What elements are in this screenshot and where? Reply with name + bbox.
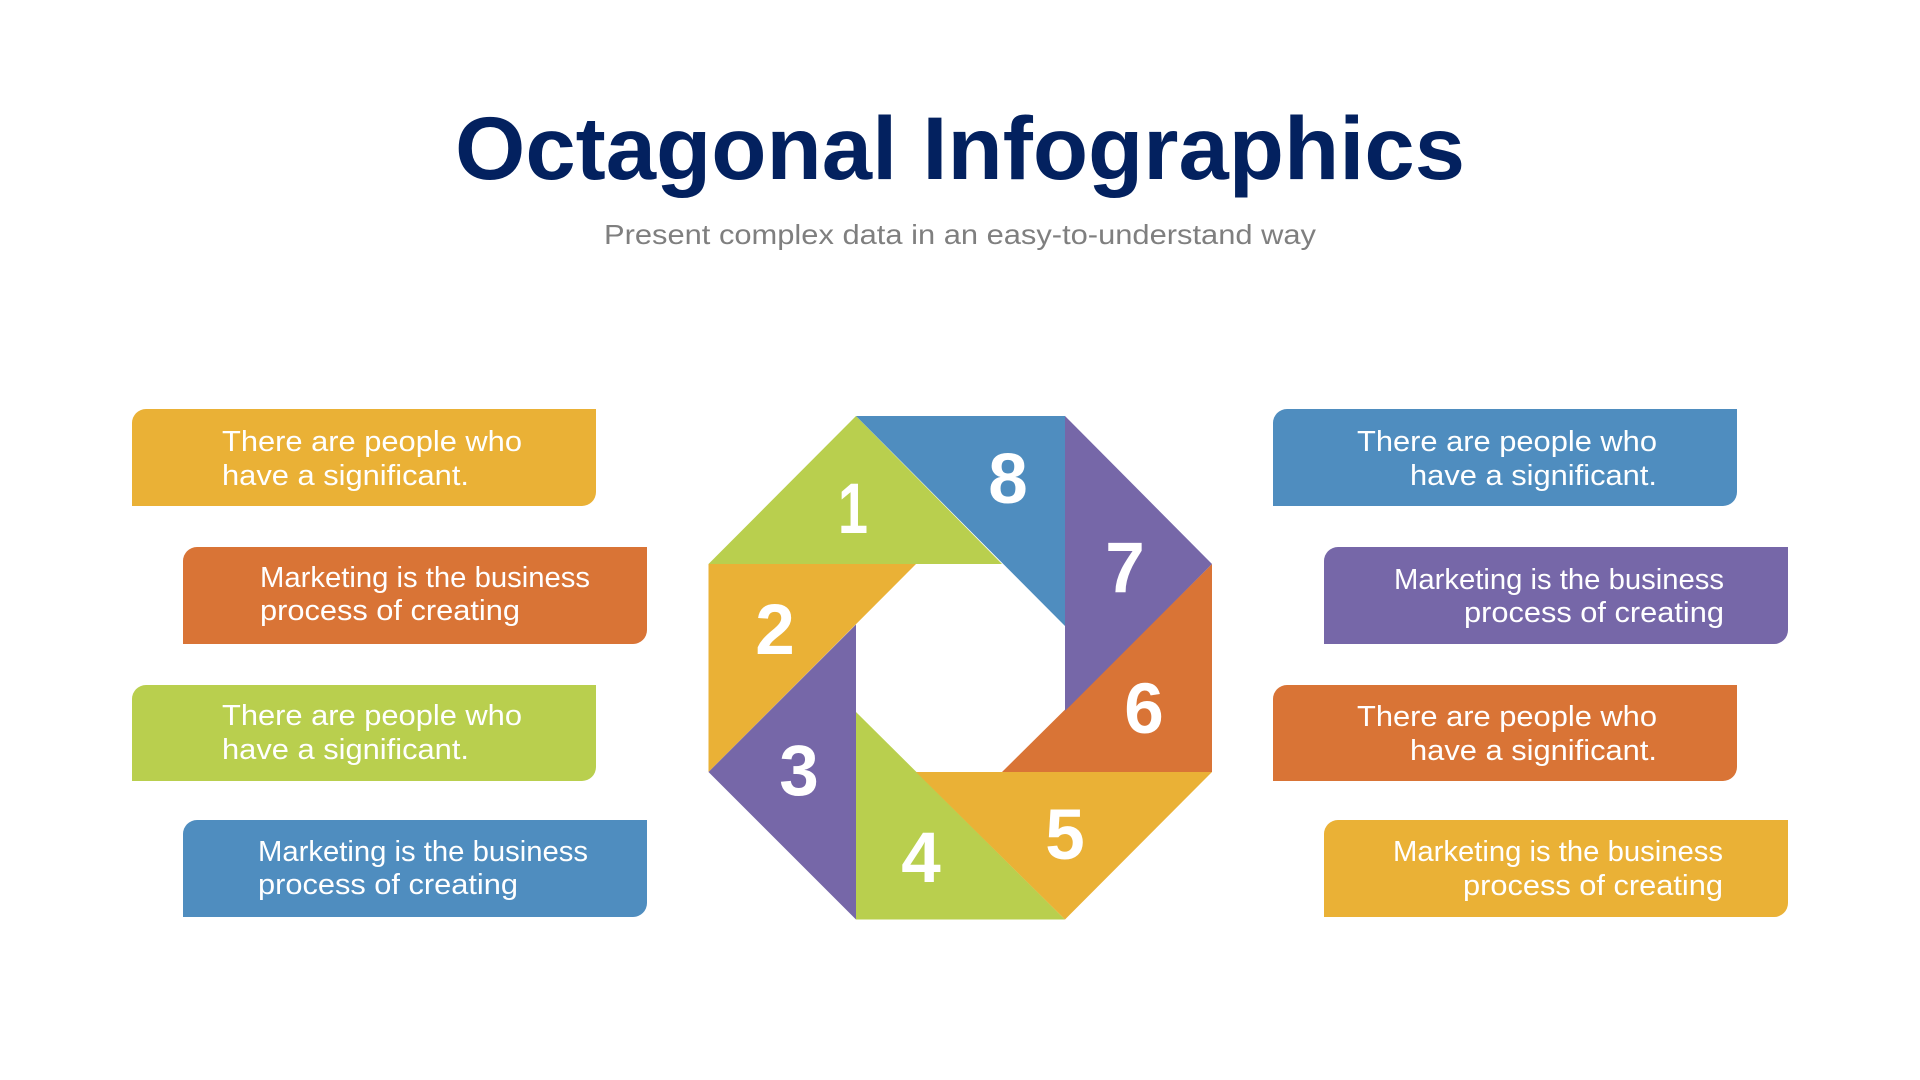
segment 1 <box>708 416 1002 564</box>
title: Octagonal Infographics <box>455 98 1465 198</box>
segment 6 <box>1002 564 1212 772</box>
label: left 1: have a significant. <box>222 460 469 492</box>
label: left 4: Marketing is the business <box>258 836 588 868</box>
segment 8 <box>856 416 1065 626</box>
segment 5 <box>916 772 1212 920</box>
label: right 3: have a significant. <box>1410 735 1657 767</box>
segment 7 <box>1065 416 1212 711</box>
label: right 2: Marketing is the business <box>1394 564 1724 596</box>
segment 3: 3 <box>779 732 819 811</box>
segment 7: 7 <box>1105 529 1145 608</box>
label: left 4 <box>183 820 647 917</box>
label: left 1: There are people who <box>222 426 522 458</box>
label: left 1 <box>132 409 596 506</box>
label: right 2 <box>1324 547 1788 644</box>
label: left 3: have a significant. <box>222 734 469 766</box>
label: right 2: process of creating <box>1464 597 1724 629</box>
segment 4: 4 <box>901 819 941 898</box>
segment 2: 2 <box>755 591 795 670</box>
segment 4 <box>856 712 1065 920</box>
segment 3 <box>708 624 856 920</box>
chart: octagon of numbered triangles <box>708 416 1212 920</box>
segment 6: 6 <box>1124 670 1164 749</box>
label: left 3 <box>132 685 596 781</box>
label: right 3 <box>1273 685 1737 781</box>
label: left 3: There are people who <box>222 700 522 732</box>
label: right 3: There are people who <box>1357 701 1657 733</box>
label: right 1: have a significant. <box>1410 460 1657 492</box>
segment 8: 8 <box>988 440 1028 519</box>
subtitle: Present complex data in an easy-to-understand way <box>604 219 1316 250</box>
panel: left labels <box>132 409 647 917</box>
label: right 4 <box>1324 820 1788 917</box>
panel: right labels <box>1273 409 1788 917</box>
label: left 4: process of creating <box>258 869 518 901</box>
segment 1: 1 <box>838 470 868 549</box>
label: left 2: process of creating <box>260 595 520 627</box>
label: right 1: There are people who <box>1357 426 1657 458</box>
label: left 2: Marketing is the business <box>260 562 590 594</box>
label: left 2 <box>183 547 647 644</box>
label: right 1 <box>1273 409 1737 506</box>
label: right 4: process of creating <box>1463 870 1723 902</box>
segment 5: 5 <box>1045 796 1085 875</box>
label: right 4: Marketing is the business <box>1393 836 1723 868</box>
segment 2 <box>708 564 916 772</box>
